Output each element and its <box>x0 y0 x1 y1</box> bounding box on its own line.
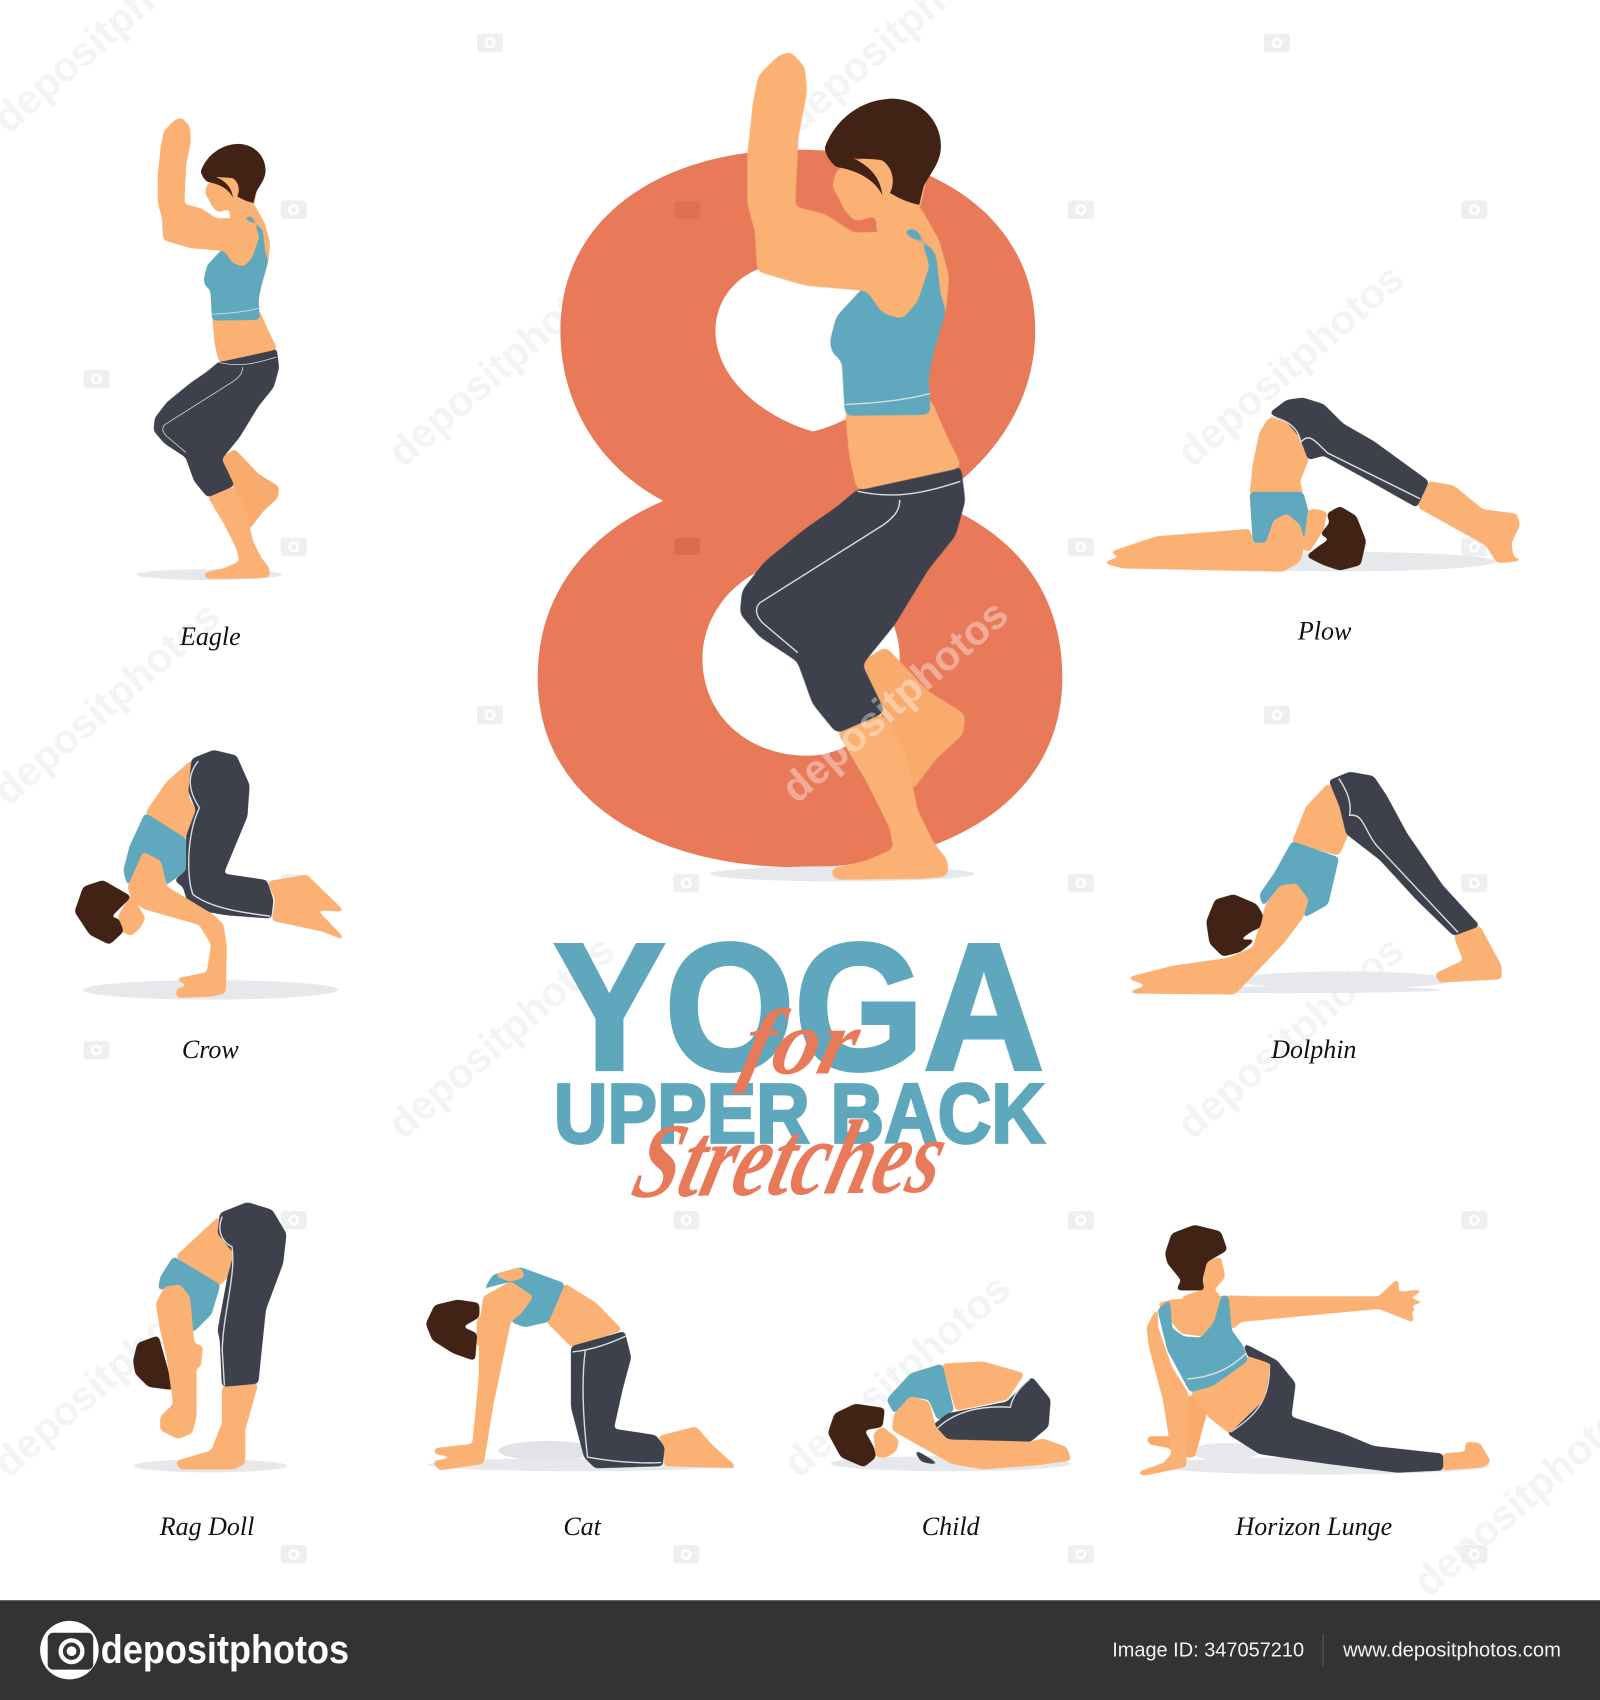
top band seam <box>846 394 930 404</box>
pose: Dolphin <box>1124 772 1501 994</box>
child back <box>942 1362 1024 1411</box>
pose: Horizon Lunge <box>1137 1225 1491 1476</box>
sports top <box>830 229 945 415</box>
watermark: repeated depositphotos marks: depositphotos <box>379 254 623 475</box>
child arm and foot <box>892 1396 1071 1469</box>
rag doll lower leg <box>176 1383 258 1469</box>
watermark over the central figure: depositphotos <box>772 590 1017 811</box>
pose: Child <box>828 1362 1071 1471</box>
plow torso <box>1250 417 1308 494</box>
cat foot <box>658 1427 737 1468</box>
crow shadow <box>82 980 338 1000</box>
label: Rag Doll: Rag Doll <box>159 1512 254 1541</box>
lunge midriff <box>1190 1356 1270 1433</box>
hair <box>825 99 941 205</box>
back lower leg <box>863 647 965 789</box>
title script: Stretches: Stretches <box>622 1097 960 1221</box>
cat shadow <box>499 1441 596 1460</box>
plow lower leg <box>1418 481 1526 563</box>
label: Cat: Cat <box>563 1512 602 1541</box>
cat midriff <box>546 1284 622 1347</box>
child hair <box>828 1404 885 1467</box>
cat leggings <box>571 1331 664 1468</box>
child knee <box>913 1448 942 1466</box>
lunge top <box>1158 1296 1248 1392</box>
dolphin soft shadow <box>1138 987 1442 993</box>
label: Child: Child <box>922 1512 981 1541</box>
rag doll arm <box>156 1285 203 1439</box>
pose: Cat <box>426 1267 737 1471</box>
leggings seam <box>757 481 960 653</box>
cat seam <box>572 1336 661 1463</box>
plow seam <box>1270 416 1420 499</box>
watermark: repeated depositphotos marks: depositphotos <box>1168 254 1412 475</box>
cat arm <box>433 1282 533 1470</box>
cat soft shadow <box>428 1458 732 1471</box>
watermark: repeated depositphotos marks: depositphotos <box>775 1265 1019 1486</box>
watermark: repeated depositphotos marks: depositphotos <box>379 926 623 1147</box>
rag doll shadow <box>133 1459 287 1472</box>
watermark: repeated depositphotos marks: depositphotos <box>1168 926 1412 1147</box>
figure: main eagle pose <box>740 52 965 879</box>
lunge top seam <box>1187 1353 1247 1379</box>
dolphin shadow <box>1236 971 1453 989</box>
crow arm <box>128 852 227 997</box>
footer bar <box>0 1600 1600 1700</box>
rag doll seam <box>220 1216 233 1386</box>
label: Dolphin: Dolphin <box>1270 1035 1356 1064</box>
child seam <box>937 1379 1030 1429</box>
cat top <box>479 1267 565 1327</box>
child shadow <box>830 1456 1071 1471</box>
rag doll back <box>176 1215 234 1287</box>
lunge neck <box>1172 1257 1225 1300</box>
dolphin top <box>1260 841 1339 918</box>
cat face <box>477 1311 511 1347</box>
lunge back skin <box>1158 1296 1225 1337</box>
leggings <box>740 466 965 733</box>
crow back <box>145 759 196 839</box>
rag doll top <box>158 1257 220 1334</box>
front lower leg <box>830 714 947 879</box>
lunge soft shadow <box>1154 1457 1491 1474</box>
dolphin hair <box>1207 894 1263 956</box>
title script: for: for <box>732 992 871 1094</box>
neck and back <box>877 206 949 314</box>
plow top <box>1250 492 1309 550</box>
pose: Eagle <box>137 118 282 580</box>
pose: Crow <box>75 750 347 1000</box>
rag doll hair <box>133 1336 173 1390</box>
title: YOGA: YOGA <box>554 907 1044 1108</box>
plow leggings <box>1269 398 1429 507</box>
eagle figure <box>154 118 279 579</box>
plow shadow <box>1192 552 1496 571</box>
plow face <box>1303 510 1327 552</box>
label: Eagle: Eagle <box>179 622 241 651</box>
crow seam <box>189 761 270 916</box>
lunge supporting arm <box>1137 1306 1188 1476</box>
crow feet <box>268 875 347 941</box>
pose: Plow <box>1102 398 1526 571</box>
child top <box>887 1364 954 1420</box>
arms and hands <box>748 52 929 319</box>
cat shoulder <box>493 1267 525 1282</box>
crow hair <box>75 880 131 944</box>
dolphin back <box>1292 783 1349 855</box>
lunge leggings <box>1227 1343 1443 1472</box>
plow arms <box>1102 514 1305 571</box>
lunge foot <box>1443 1442 1491 1470</box>
footer image id: Image ID: 347057210 <box>1112 1639 1304 1662</box>
lunge hair <box>1165 1225 1227 1290</box>
figure shadow: main eagle <box>710 866 975 881</box>
midriff <box>846 399 962 490</box>
footer url: www.depositphotos.com <box>1342 1639 1561 1662</box>
label: Plow: Plow <box>1297 617 1352 646</box>
child leggings <box>931 1377 1050 1443</box>
cat hair <box>426 1300 479 1361</box>
crow top <box>124 813 186 887</box>
child face <box>874 1427 899 1457</box>
footer logo text: depositphotos <box>101 1628 349 1672</box>
dolphin seam <box>1339 778 1458 932</box>
eagle shadow <box>137 569 282 580</box>
face <box>833 152 928 234</box>
title: UPPER BACK: UPPER BACK <box>554 1066 1045 1161</box>
lunge shadow <box>1190 1443 1260 1460</box>
dolphin leggings <box>1329 772 1480 936</box>
crow face <box>118 894 145 936</box>
icon: depositphotos camera logo <box>40 1621 99 1679</box>
label: Crow: Crow <box>182 1035 239 1064</box>
big number 8 <box>538 150 1062 867</box>
dolphin lower leg <box>1435 926 1501 982</box>
lunge extended arm <box>1225 1278 1428 1330</box>
lunge seam <box>1230 1364 1269 1432</box>
dolphin arms <box>1124 884 1308 994</box>
plow hair <box>1306 506 1366 570</box>
rag doll leggings <box>218 1202 286 1387</box>
pose: Rag Doll <box>133 1202 287 1472</box>
crow leggings <box>175 750 273 918</box>
label: Horizon Lunge: Horizon Lunge <box>1234 1512 1392 1541</box>
lunge back arm <box>1147 1393 1207 1457</box>
